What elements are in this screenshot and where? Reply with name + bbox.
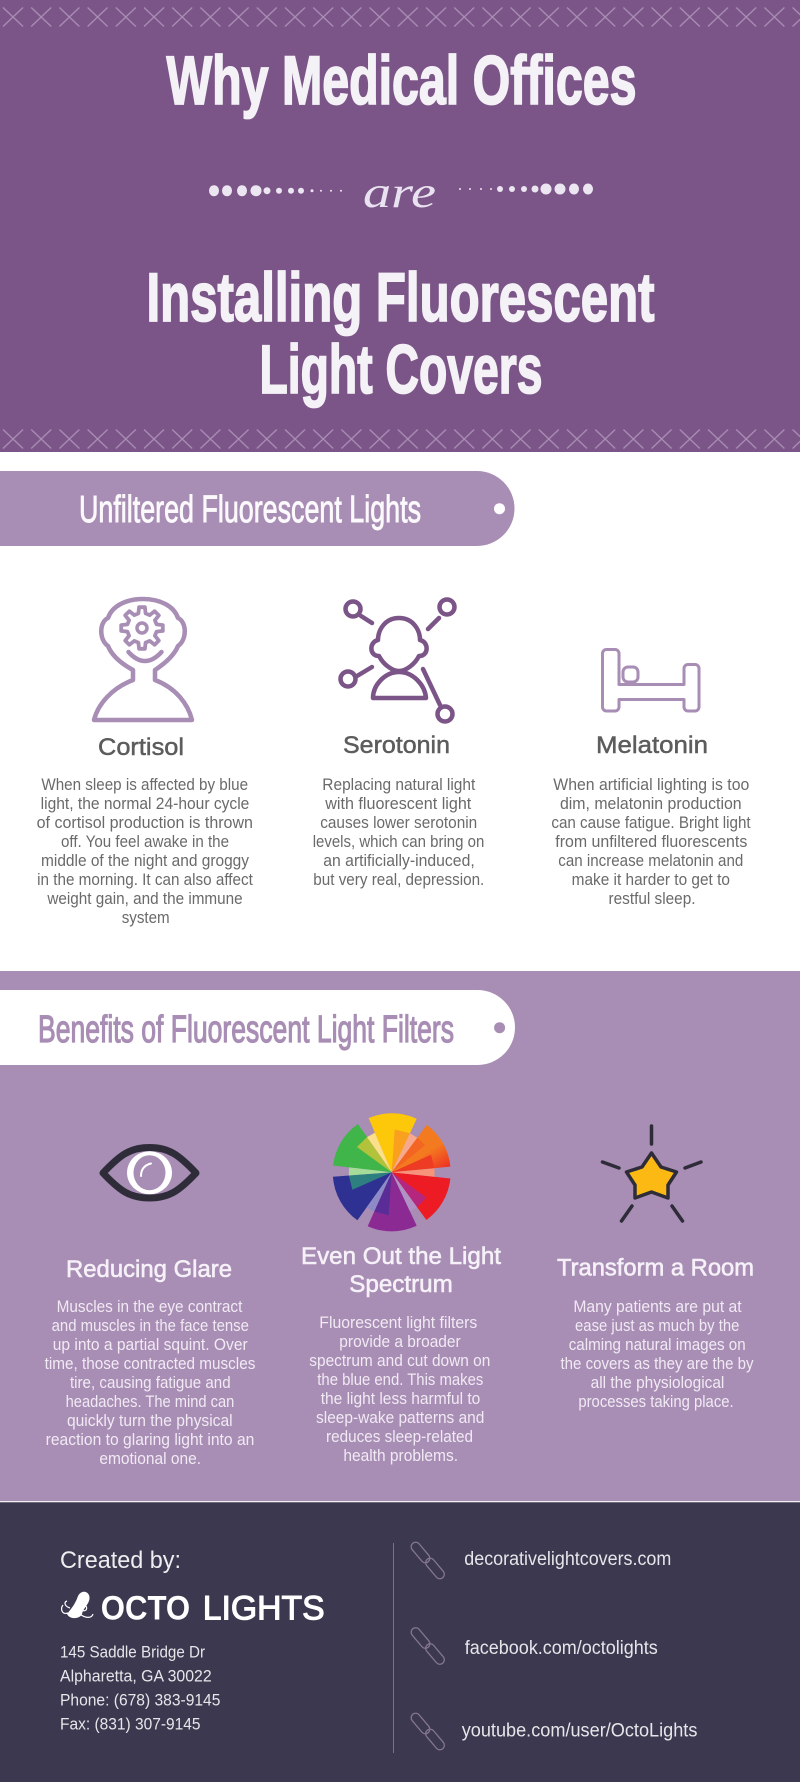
column: Cortisol — [37, 599, 253, 927]
text: transform description — [560, 1297, 754, 1411]
text: glare description: tire, causing fatigue and — [70, 1373, 231, 1392]
column: Even Out the Light Spectrum — [301, 1113, 501, 1465]
text: transform description: Many patients are put at — [573, 1297, 742, 1316]
title line: Light Covers: Light Covers — [260, 331, 542, 408]
text: transform description: processes taking place. — [578, 1392, 734, 1411]
text: melatonin description: can cause fatigue. Bright light — [551, 813, 751, 832]
heading: Reducing Glare: Reducing Glare — [66, 1256, 232, 1283]
text: spectrum description: reduces sleep-related — [326, 1427, 473, 1446]
text: spectrum description: the light less harmful to — [321, 1389, 480, 1408]
word: are: are — [363, 168, 436, 217]
banner: Benefits of Fluorescent Light Filters: Benefits of Fluorescent Light Filters — [38, 1009, 454, 1051]
text: melatonin description: make it harder to get to — [572, 870, 730, 889]
text: glare description: time, those contracted muscles — [45, 1354, 255, 1373]
icon: octopus — [62, 1592, 93, 1618]
text: transform description: the covers as they are the by — [560, 1354, 754, 1373]
dotted divider right — [459, 184, 593, 194]
text: address: 145 Saddle Bridge Dr — [60, 1643, 205, 1662]
text: spectrum description — [309, 1313, 490, 1465]
heading: Cortisol: Cortisol — [98, 734, 184, 761]
text: glare description: quickly turn the physical — [67, 1411, 233, 1430]
text: address: Alpharetta, GA 30022 — [60, 1667, 212, 1686]
link: youtube — [409, 1711, 697, 1752]
heading: Transform a Room: Transform a Room — [557, 1255, 754, 1282]
text: serotonin description: Replacing natural light — [322, 775, 476, 794]
text: spectrum description: the blue end. This makes — [317, 1370, 483, 1389]
text: address — [60, 1643, 220, 1733]
text: melatonin description: dim, melatonin production — [560, 794, 742, 813]
link: website — [409, 1540, 671, 1581]
text: spectrum description: provide a broader — [339, 1332, 461, 1351]
text: cortisol description: of cortisol production is thrown — [37, 813, 253, 832]
icon: shining star — [602, 1126, 701, 1221]
text: serotonin description: levels, which can bring on — [313, 832, 484, 851]
link: facebook: facebook.com/octolights — [465, 1638, 658, 1659]
text: glare description: up into a partial squint. Over — [53, 1335, 248, 1354]
text: cortisol description: off. You feel awake in the — [61, 832, 229, 851]
icon: eye — [103, 1148, 196, 1198]
heading: Even Out the Light Spectrum — [301, 1243, 501, 1298]
panel: benefits background — [0, 971, 800, 1501]
text: spectrum description: spectrum and cut down on — [309, 1351, 490, 1370]
text: cortisol description: When sleep is affected by blue — [41, 775, 248, 794]
text: cortisol description: middle of the night and groggy — [41, 851, 249, 870]
header panel — [0, 0, 800, 452]
text: serotonin description: but very real, depression. — [313, 870, 484, 889]
link: facebook — [409, 1626, 658, 1666]
text: glare description: emotional one. — [99, 1449, 201, 1468]
text: glare description: reaction to glaring light into an — [46, 1430, 254, 1449]
banner: Unfiltered Fluorescent Lights — [0, 471, 514, 546]
icon: person with nodes — [340, 600, 454, 722]
text: glare description: headaches. The mind can — [66, 1392, 234, 1411]
text: glare description — [45, 1297, 255, 1468]
text: cortisol description: weight gain, and the immune — [46, 889, 243, 908]
text: glare description: and muscles in the face tense — [52, 1316, 249, 1335]
text: cortisol description — [37, 775, 253, 927]
text: melatonin description: When artificial lighting is too — [553, 775, 749, 794]
heading: Serotonin: Serotonin — [343, 732, 450, 759]
text: spectrum description: Fluorescent light filters — [319, 1313, 477, 1332]
text: spectrum description: health problems. — [343, 1446, 458, 1465]
footer panel — [0, 1501, 800, 1782]
text: melatonin description — [551, 775, 751, 908]
column: Reducing Glare — [45, 1148, 255, 1468]
text: transform description: all the physiological — [591, 1373, 724, 1392]
link: youtube: youtube.com/user/OctoLights — [462, 1721, 697, 1742]
text: melatonin description: restful sleep. — [608, 889, 696, 908]
text: address: Fax: (831) 307-9145 — [60, 1714, 200, 1733]
icon: head with gear — [94, 599, 192, 720]
text: transform description: ease just as much by the — [575, 1316, 739, 1335]
heading: Even Out the Light Spectrum: Even Out the Light — [301, 1243, 501, 1270]
text: serotonin description: causes lower serotonin — [320, 813, 477, 832]
text: address: Phone: (678) 383-9145 — [60, 1691, 220, 1710]
text: spectrum description: sleep-wake patterns and — [316, 1408, 484, 1427]
link: website: decorativelightcovers.com — [464, 1549, 671, 1570]
text: glare description: Muscles in the eye contract — [57, 1297, 243, 1316]
heading: Even Out the Light Spectrum: Spectrum — [349, 1271, 453, 1298]
text: melatonin description: from unfiltered fluorescents — [555, 832, 747, 851]
text: serotonin description: an artificially-induced, — [323, 851, 475, 870]
column: Transform a Room — [557, 1126, 754, 1411]
icon: bed — [602, 650, 699, 711]
banner: Unfiltered Fluorescent Lights: Unfiltered Fluorescent Lights — [79, 489, 421, 531]
text: cortisol description: light, the normal 24-hour cycle — [41, 794, 249, 813]
heading: Melatonin: Melatonin — [596, 732, 708, 759]
text: serotonin description: with fluorescent light — [324, 794, 472, 813]
text: transform description: calming natural images on — [569, 1335, 746, 1354]
dotted divider left — [209, 185, 342, 196]
text: Created by: Created by: — [60, 1547, 181, 1574]
text: cortisol description: system — [122, 908, 170, 927]
logo: Octo Lights — [62, 1589, 325, 1627]
column: Melatonin — [551, 650, 751, 908]
text: cortisol description: in the morning. It can also affect — [37, 870, 253, 889]
text: serotonin description — [313, 775, 484, 889]
column: Serotonin — [313, 600, 484, 889]
logo: Octo Lights: LIGHTS — [203, 1589, 325, 1627]
logo: Octo Lights: OCTO — [101, 1589, 190, 1627]
text: melatonin description: can increase melatonin and — [558, 851, 743, 870]
banner: Benefits of Fluorescent Light Filters — [0, 990, 515, 1065]
icon: colour wheel — [333, 1113, 450, 1231]
